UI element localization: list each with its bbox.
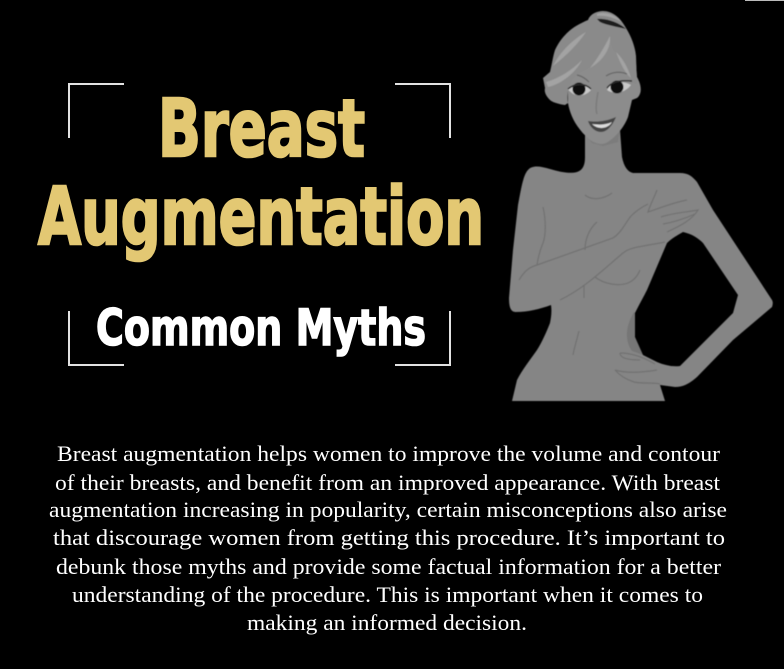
body contour lines	[519, 190, 698, 384]
nose	[596, 92, 598, 114]
hair	[543, 11, 637, 105]
intro paragraph: of their breasts, and benefit from an improved appearance. With breast	[55, 470, 721, 495]
title frame brackets	[69, 84, 450, 365]
lips	[588, 117, 616, 132]
title: Breast: Breast	[158, 83, 365, 175]
hair highlights	[546, 13, 631, 87]
intro paragraph	[49, 441, 727, 635]
intro paragraph: augmentation increasing in popularity, certain misconceptions also arise	[49, 497, 727, 522]
illustration: woman figure	[509, 11, 773, 401]
subtitle: Common Myths: Common Myths	[96, 299, 426, 357]
neck shadow	[585, 128, 620, 146]
intro paragraph: that discourage women from getting this procedure. It’s important to	[53, 525, 725, 550]
intro paragraph: understanding of the procedure. This is important when it comes to	[72, 582, 703, 607]
intro paragraph: Breast augmentation helps women to improve the volume and contour	[57, 441, 721, 466]
hair tie	[597, 19, 626, 29]
title: Augmentation: Augmentation	[38, 171, 484, 263]
intro paragraph: debunk those myths and provide some factual information for a better	[56, 554, 722, 579]
body silhouette	[509, 130, 773, 401]
eyes	[568, 72, 632, 96]
head and face	[567, 37, 641, 144]
waist shadow	[627, 312, 643, 355]
intro paragraph: making an informed decision.	[247, 610, 527, 635]
